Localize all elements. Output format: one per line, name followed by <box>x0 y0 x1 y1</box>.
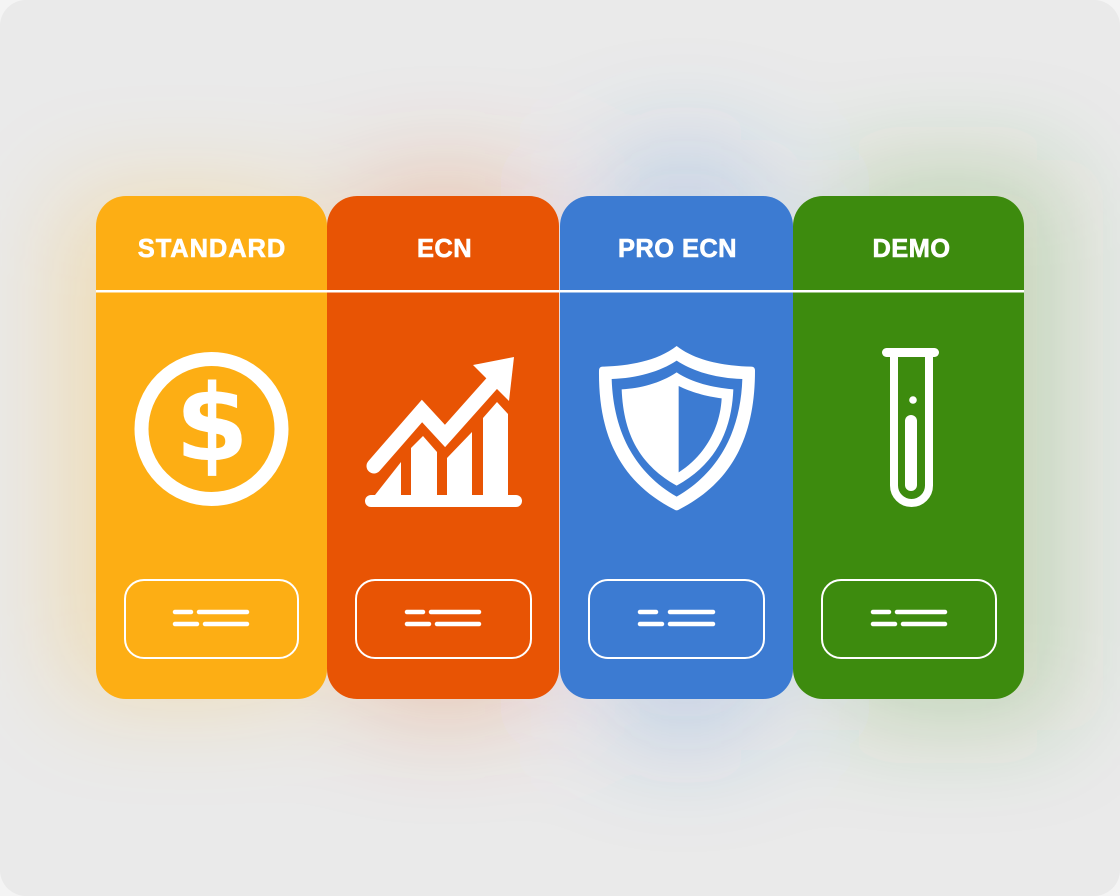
button placeholder: ECN <box>356 580 531 658</box>
panel: STANDARD <box>96 196 327 699</box>
icon: test tube <box>882 348 939 503</box>
panel: DEMO <box>793 196 1024 699</box>
heading: DEMO: DEMO <box>872 235 951 263</box>
heading: STANDARD: STANDARD <box>138 235 286 263</box>
icon: growth chart <box>365 357 522 507</box>
icon: shield <box>599 346 755 510</box>
panel: ECN <box>327 196 559 699</box>
button placeholder: DEMO <box>822 580 996 658</box>
heading: ECN: ECN <box>417 235 472 263</box>
button placeholder: PRO ECN <box>589 580 764 658</box>
button placeholder: STANDARD <box>125 580 298 658</box>
heading: PRO ECN: PRO ECN <box>618 235 737 263</box>
icon: dollar coin <box>142 359 282 499</box>
header divider line <box>96 290 1024 292</box>
panel: PRO ECN <box>560 196 793 699</box>
icon: dollar coin: $ <box>175 362 249 485</box>
